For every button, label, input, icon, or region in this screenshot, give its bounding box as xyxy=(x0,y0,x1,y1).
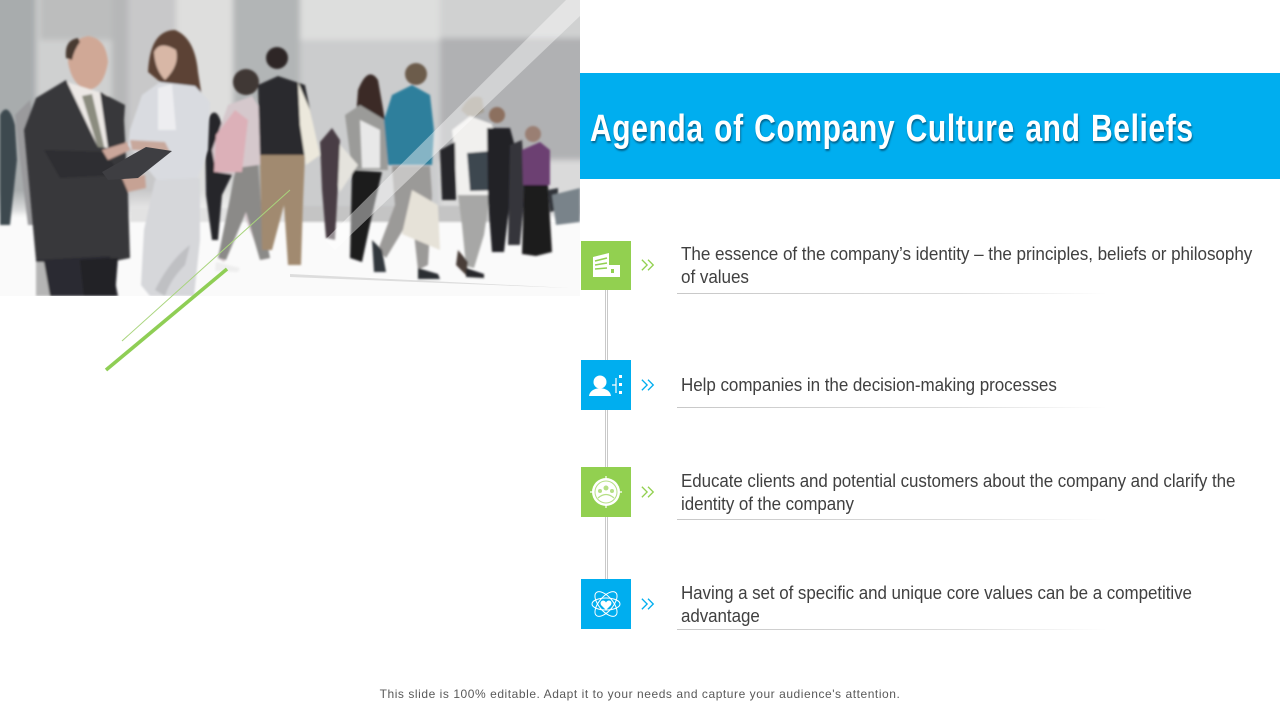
accent: thin green diagonal line xyxy=(122,190,290,341)
blue jacket man xyxy=(405,63,427,85)
text: Help companies in the decision-making processes xyxy=(681,375,1057,395)
man in dark suit xyxy=(24,36,146,296)
long hair woman xyxy=(355,74,385,135)
clipboard xyxy=(102,147,172,180)
group on the right xyxy=(489,107,505,123)
text: advantage xyxy=(681,606,760,626)
text xyxy=(681,244,1252,287)
heading: Agenda of Company Culture and Beliefs xyxy=(590,108,1194,150)
chevrons xyxy=(642,486,654,498)
text xyxy=(681,583,1192,626)
ground xyxy=(0,222,580,296)
agenda item 3 xyxy=(581,467,1235,520)
title banner xyxy=(580,73,1280,179)
agenda item 4 xyxy=(581,579,1192,630)
underline xyxy=(677,293,1107,294)
woman in light suit xyxy=(128,30,210,296)
icon: person with decision options xyxy=(581,360,631,410)
footer note: This slide is 100% editable. Adapt it to your needs and capture your audience's attention. xyxy=(380,687,900,701)
purple-shirt back walker xyxy=(320,128,340,240)
background crowd xyxy=(0,47,580,279)
woman with tote xyxy=(461,96,484,118)
text: of values xyxy=(681,267,749,287)
accent: thick green diagonal line xyxy=(106,269,227,370)
agenda item 2 xyxy=(581,360,1072,410)
chevrons xyxy=(642,598,654,610)
underline xyxy=(677,629,1107,630)
timeline connector xyxy=(605,290,608,580)
white clear below photo xyxy=(0,296,580,375)
text: identity of the company xyxy=(681,494,854,514)
agenda item 1 xyxy=(581,241,1252,294)
underline xyxy=(677,407,1107,408)
text xyxy=(681,471,1235,514)
dark hoodie walker xyxy=(266,47,288,69)
icon: office building xyxy=(581,241,631,290)
underline xyxy=(677,519,1107,520)
backpack walker xyxy=(233,69,259,95)
text: The essence of the company’s identity – the principles, beliefs or philosophy xyxy=(681,244,1252,264)
chevrons xyxy=(642,259,654,271)
plaza background xyxy=(0,0,590,215)
icon: atom with heart xyxy=(581,579,631,629)
text: Having a set of specific and unique core values can be a competitive xyxy=(681,583,1192,603)
icon: target audience xyxy=(581,467,631,517)
translucent diagonal band xyxy=(325,0,580,250)
chevrons xyxy=(642,379,654,391)
photo: business people in a city plaza xyxy=(0,0,580,372)
text: Educate clients and potential customers about the company and clarify the xyxy=(681,471,1235,491)
